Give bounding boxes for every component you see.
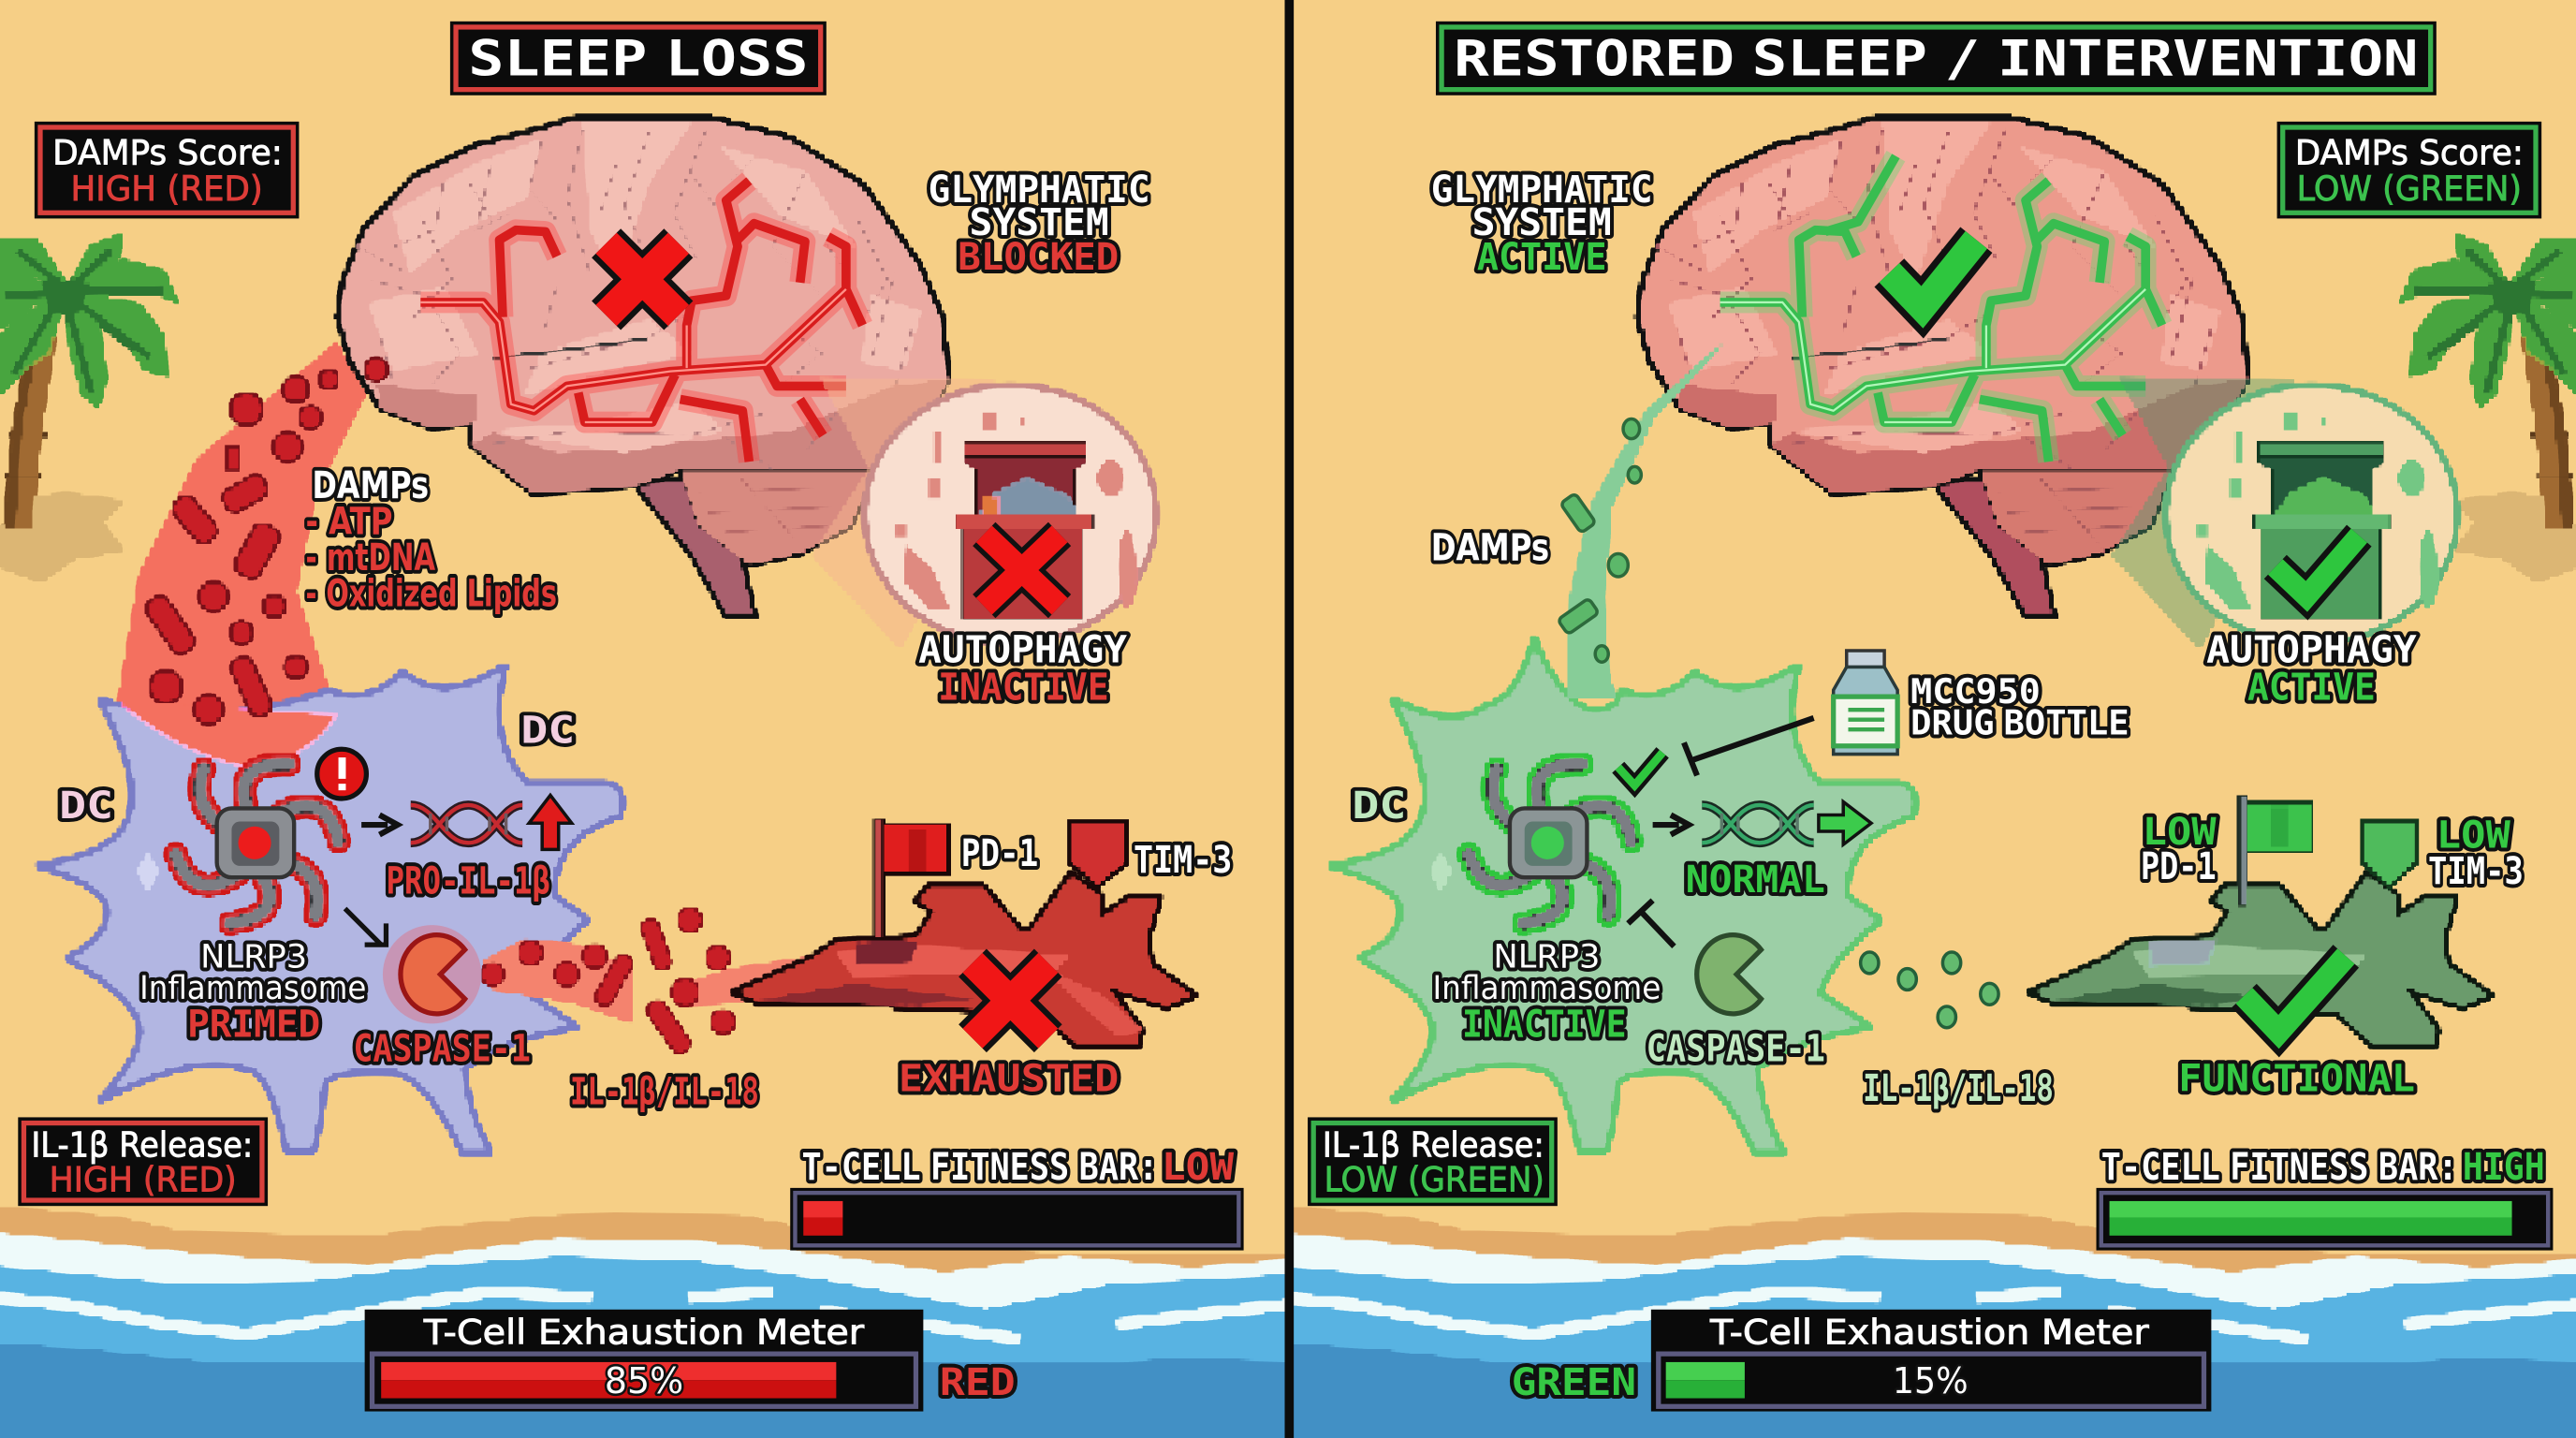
exhaustion meter: 85% — [605, 1360, 683, 1402]
icon: green check on jet — [2244, 956, 2346, 1032]
exhaustion meter right: 15% — [1893, 1360, 1969, 1402]
organelles — [2197, 411, 2438, 611]
exhausted jet — [735, 818, 1194, 1045]
title: restored sleep — [1436, 22, 2437, 95]
bottle label: DRUG BOTTLE — [1910, 702, 2130, 742]
arrow to DNA — [361, 814, 398, 835]
cytokine plume — [485, 940, 805, 1022]
panel: restored sleep — [1308, 22, 2553, 1412]
exhaustion meter right — [1651, 1310, 2211, 1412]
DAMPs particles right — [1558, 419, 1641, 662]
cerebellum folds — [698, 477, 855, 550]
DC labels: DC — [520, 708, 575, 752]
central fissure — [493, 339, 649, 359]
exhaustion meter: T-Cell Exhaustion Meter — [423, 1313, 865, 1353]
icon: green check on brain — [1889, 240, 1976, 307]
shield low TIM-3 — [2364, 822, 2415, 886]
legs — [176, 764, 339, 923]
icon: small check — [1618, 753, 1662, 785]
inhibition from caspase — [1628, 901, 1674, 946]
dendritic cell green — [1332, 640, 1914, 1152]
RED tag: RED — [940, 1360, 1016, 1404]
DAMPs stream thin — [1567, 344, 1723, 698]
organelles — [896, 411, 1137, 611]
glymphatic label right: ACTIVE — [1477, 235, 1606, 279]
icon: green check on chest — [2276, 536, 2359, 596]
brain right — [1638, 118, 2247, 614]
icon: red X on jet — [973, 962, 1048, 1038]
TIM-3 label: TIM-3 — [1134, 838, 1232, 882]
glymphatic label right — [1431, 168, 1653, 279]
IL-1b release box: IL-1β Release: — [31, 1125, 253, 1166]
title: restored sleep: RESTORED SLEEP / INTERVENTION — [1454, 31, 2419, 88]
center divider — [1284, 0, 1294, 1438]
autophagy label — [918, 627, 1128, 710]
icon: up arrow — [529, 795, 572, 849]
low PD-1 label: LOW — [2143, 810, 2217, 854]
NLRP3 inflammasome — [176, 764, 339, 923]
IL-1b release box right — [1308, 1117, 1558, 1206]
dendritic cell — [39, 668, 622, 1152]
exhausted label: EXHAUSTED — [899, 1056, 1119, 1100]
DC label right: DC — [1352, 784, 1406, 828]
cerebrum — [1638, 118, 2247, 493]
functional label: FUNCTIONAL — [2178, 1056, 2415, 1100]
brain stem — [1936, 477, 2054, 614]
autophagy label right — [2206, 627, 2417, 710]
palm tree right — [2400, 233, 2576, 581]
DAMPs plume — [118, 344, 365, 764]
IL-1b release box — [18, 1117, 268, 1206]
cytokine particles right — [1861, 952, 1998, 1028]
sulci — [359, 128, 912, 468]
glymphatic label — [929, 168, 1150, 279]
cerebellum — [681, 470, 874, 565]
autophagy label: AUTOPHAGY — [918, 627, 1128, 671]
icon: red X on brain — [607, 243, 679, 315]
autophagy lens — [866, 386, 1155, 642]
NLRP3 label right: INACTIVE — [1462, 1002, 1627, 1046]
low TIM-3 label: LOW — [2437, 814, 2511, 858]
DAMPs list: - mtDNA — [305, 536, 436, 580]
exhaustion meter — [365, 1310, 923, 1412]
cytokine particles — [483, 909, 734, 1054]
brain — [339, 118, 948, 614]
low TIM-3 label — [2428, 814, 2524, 893]
autophagy label right: AUTOPHAGY — [2206, 627, 2417, 671]
caspase-1 active — [383, 925, 481, 1023]
fitness bar: LOW — [1162, 1145, 1235, 1189]
icon: alert badge — [317, 749, 366, 799]
icon: drug bottle — [1834, 651, 1897, 755]
legs — [1469, 764, 1632, 923]
fitness bar: T-CELL FITNESS BAR: — [801, 1145, 1158, 1189]
functional jet — [2030, 795, 2491, 1045]
IL-1b release box right: IL-1β Release: — [1323, 1125, 1544, 1166]
fitness bar — [790, 1145, 1244, 1251]
NLRP3 label: NLRP3 — [200, 938, 307, 976]
lower shading — [374, 378, 948, 493]
inhibition from bottle — [1684, 718, 1814, 775]
NLRP3 label right: Inflammasome — [1432, 969, 1661, 1007]
caspase-1 inactive — [1697, 935, 1761, 1014]
icon: chest open — [2254, 442, 2391, 620]
central fissure — [1793, 339, 1949, 359]
shore left — [0, 1208, 1288, 1438]
fitness bar right — [2097, 1145, 2553, 1251]
bottle label — [1910, 671, 2130, 742]
core chip — [1510, 808, 1587, 877]
DAMPs list: - Oxidized Lipids — [305, 572, 557, 616]
gyri highlights — [1669, 124, 2219, 452]
NLRP3 label — [139, 938, 366, 1046]
cerebellum — [1980, 470, 2174, 565]
icon: DNA — [411, 805, 522, 843]
caspase label: CASPASE-1 — [353, 1027, 531, 1071]
core chip — [217, 808, 294, 877]
DAMPs label right: DAMPs — [1431, 525, 1549, 569]
icon: red X on chest — [984, 534, 1060, 607]
glymphatic label: GLYMPHATIC — [929, 168, 1150, 212]
fitness bar right: HIGH — [2463, 1145, 2545, 1189]
NLRP3 label: Inflammasome — [139, 969, 366, 1007]
autophagy label: INACTIVE — [938, 666, 1109, 710]
autophagy label right: ACTIVE — [2247, 666, 2376, 710]
fitness bar right: T-CELL FITNESS BAR: — [2101, 1145, 2458, 1189]
DAMPs score box right: LOW (GREEN) — [2297, 169, 2522, 209]
NLRP3 label: PRIMED — [187, 1002, 320, 1046]
flag low PD-1 — [2237, 795, 2311, 907]
zoom wedge right — [2113, 378, 2293, 647]
DAMPs score box — [35, 122, 299, 218]
brain stem — [636, 477, 754, 614]
PD-1 label: PD-1 — [961, 831, 1038, 875]
NLRP3 label right: NLRP3 — [1493, 938, 1600, 976]
exhaustion meter right: T-Cell Exhaustion Meter — [1709, 1313, 2150, 1353]
DAMPs list: DAMPs — [312, 463, 429, 507]
DAMPs particles — [144, 360, 386, 723]
cytokine label: IL-1β/IL-18 — [570, 1069, 759, 1113]
cerebrum — [339, 118, 948, 493]
icon: chest open with debris — [956, 442, 1092, 620]
DAMPs score box: DAMPs Score: — [52, 133, 283, 173]
IL-1b release box right: LOW (GREEN) — [1325, 1159, 1544, 1199]
cytokine label right: IL-1β/IL-18 — [1863, 1066, 2054, 1110]
lower shading — [1674, 378, 2247, 493]
autophagy lens right — [2167, 386, 2456, 642]
NLRP3 inflammasome right — [1469, 764, 1632, 923]
caspase label right: CASPASE-1 — [1647, 1027, 1825, 1071]
DC labels: DC — [59, 784, 113, 828]
glymphatic network active — [1720, 156, 2162, 462]
DAMPs list — [305, 463, 557, 616]
glymphatic network blocked — [420, 181, 862, 462]
bottle label: MCC950 — [1910, 671, 2041, 712]
arrow to DNA right — [1653, 814, 1689, 835]
pro-IL-1b label: PRO-IL-1β — [386, 859, 550, 903]
IL-1b release box: HIGH (RED) — [50, 1159, 237, 1199]
zoom wedge — [813, 378, 994, 647]
glymphatic label right: GLYMPHATIC — [1431, 168, 1653, 212]
icon: DNA right — [1702, 805, 1814, 843]
low TIM-3 label: TIM-3 — [2428, 849, 2524, 893]
NLRP3 label right — [1432, 938, 1661, 1046]
DC labels — [59, 708, 575, 828]
title: sleep loss: SLEEP LOSS — [468, 31, 809, 88]
cerebellum folds — [1998, 477, 2154, 550]
low PD-1 label — [2141, 810, 2217, 888]
DAMPs list: - ATP — [305, 499, 392, 543]
title: sleep loss — [450, 22, 827, 95]
glymphatic label right: SYSTEM — [1472, 200, 1612, 244]
sulci — [1658, 128, 2211, 468]
palm tree left — [0, 233, 178, 581]
panel: sleep loss — [18, 22, 1244, 1412]
normal label: NORMAL — [1686, 858, 1825, 902]
DAMPs score box right: DAMPs Score: — [2295, 133, 2524, 173]
shield TIM-3 — [1071, 823, 1125, 886]
flag PD-1 — [874, 818, 948, 942]
arrow to caspase — [345, 909, 386, 945]
DAMPs score box: HIGH (RED) — [70, 169, 263, 209]
shore right — [1288, 1208, 2576, 1438]
glymphatic label: BLOCKED — [958, 235, 1119, 279]
low PD-1 label: PD-1 — [2141, 844, 2217, 888]
DAMPs score box right — [2277, 122, 2541, 218]
gyri highlights — [370, 124, 920, 452]
glymphatic label: SYSTEM — [970, 200, 1109, 244]
icon: right arrow — [1819, 801, 1871, 844]
GREEN tag: GREEN — [1512, 1360, 1636, 1404]
